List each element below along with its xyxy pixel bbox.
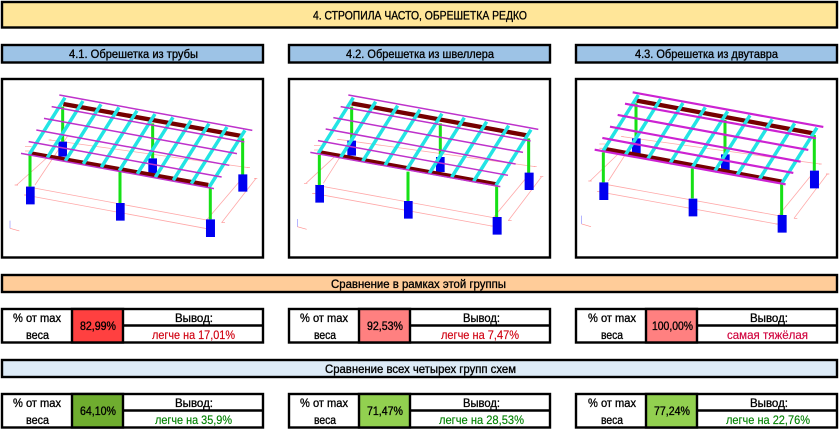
- table: 4.1 within group: [2, 309, 263, 342]
- table: 4.2 within group: % от max: [300, 311, 348, 325]
- table: 4.2 across groups: Вывод:: [463, 396, 500, 410]
- table: 4.1 across groups: Вывод:: [175, 396, 213, 410]
- panel: frame model 4.2: [289, 79, 550, 258]
- table: 4.3 within group: Вывод:: [750, 311, 788, 325]
- table: 4.1 within group: легче на 17,01%: [152, 328, 235, 342]
- heading: comparison within group: Сравнение в рамках этой группы: [331, 277, 506, 291]
- table: 4.2 within group: [289, 309, 550, 342]
- heading: comparison within group: [2, 275, 837, 292]
- title banner: [2, 2, 837, 28]
- table: 4.3 within group: веса: [601, 328, 623, 342]
- table: 4.1 across groups: 64,10%: [80, 404, 116, 418]
- table: 4.1 across groups: % от max: [13, 396, 61, 410]
- table: 4.2 across groups: 71,47%: [367, 404, 403, 418]
- table: 4.1 within group: веса: [26, 328, 49, 342]
- table: 4.2 across groups: легче на 28,53%: [439, 413, 524, 427]
- heading: comparison across groups: [2, 360, 837, 377]
- table: 4.1 within group: % от max: [13, 311, 61, 325]
- table: 4.3 across groups: легче на 22,76%: [726, 413, 810, 427]
- table: 4.1 across groups: [2, 394, 263, 428]
- heading: 4.1: [2, 45, 263, 62]
- heading: 4.3: 4.3. Обрешетка из двутавра: [635, 47, 778, 61]
- heading: 4.1: 4.1. Обрешетка из трубы: [69, 47, 198, 61]
- table: 4.3 across groups: веса: [601, 413, 623, 427]
- panel: frame model 4.1: [2, 79, 263, 258]
- table: 4.2 across groups: [289, 394, 550, 428]
- table: 4.2 across groups: веса: [314, 413, 336, 427]
- table: 4.2 within group: 92,53%: [367, 319, 403, 333]
- table: 4.1 within group: Вывод:: [175, 311, 213, 325]
- table: 4.3 within group: [576, 309, 837, 342]
- table: 4.1 within group: 82,99%: [80, 319, 116, 333]
- table: 4.2 within group: легче на 7,47%: [441, 328, 519, 342]
- table: 4.3 within group: % от max: [588, 311, 636, 325]
- heading: 4.3: [576, 45, 837, 62]
- heading: 4.2: [289, 45, 550, 62]
- heading: 4.2: 4.2. Обрешетка из швеллера: [346, 47, 494, 61]
- table: 4.3 across groups: Вывод:: [750, 396, 788, 410]
- table: 4.3 across groups: 77,24%: [654, 404, 690, 418]
- panel: frame model 4.3: [576, 79, 837, 258]
- table: 4.2 within group: Вывод:: [463, 311, 500, 325]
- table: 4.3 within group: 100,00%: [652, 319, 693, 333]
- table: 4.3 within group: самая тяжёлая: [727, 328, 808, 342]
- table: 4.3 across groups: % от max: [588, 396, 636, 410]
- table: 4.2 across groups: % от max: [300, 396, 348, 410]
- table: 4.3 across groups: [576, 394, 837, 428]
- table: 4.2 within group: веса: [314, 328, 336, 342]
- heading: comparison across groups: Сравнение всех четырех групп схем: [325, 362, 516, 376]
- title banner: 4. СТРОПИЛА ЧАСТО, ОБРЕШЕТКА РЕДКО: [313, 8, 527, 22]
- table: 4.1 across groups: легче на 35,9%: [155, 413, 232, 427]
- table: 4.1 across groups: веса: [26, 413, 49, 427]
